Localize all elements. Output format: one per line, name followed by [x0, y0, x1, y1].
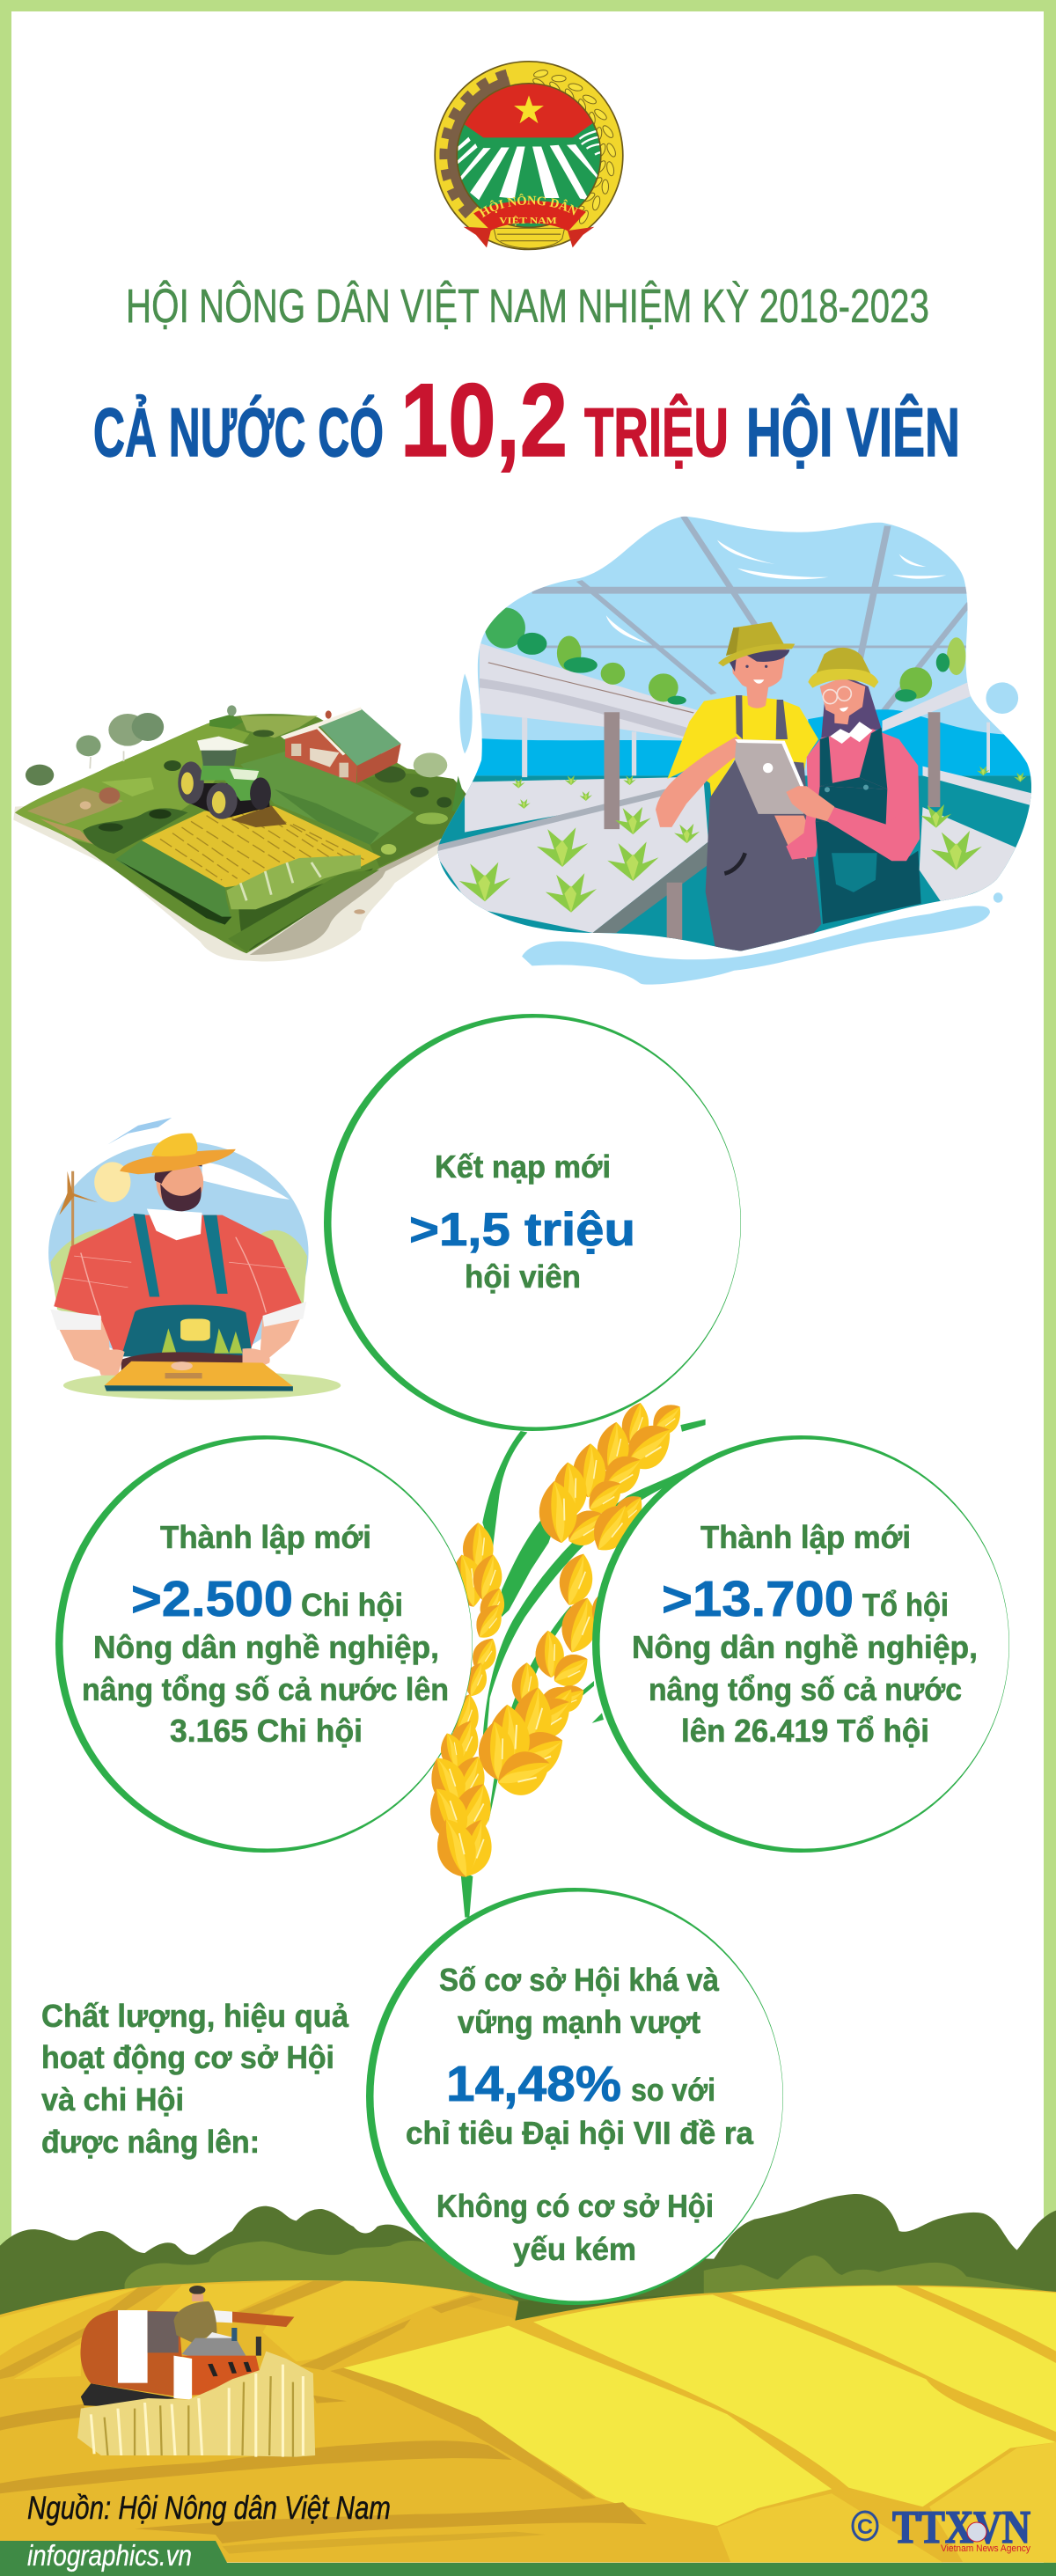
farmer face	[120, 1134, 236, 1211]
circle: quality of grassroots associations: 14,48%	[446, 2056, 621, 2112]
rice ear: behind right circle	[534, 1487, 649, 1718]
circle: left Chi hội: Nông dân nghề nghiệp,	[93, 1629, 439, 1665]
man	[656, 622, 821, 952]
circle: Kết nạp mới	[324, 1014, 741, 1431]
background	[431, 709, 1044, 775]
circle: left Chi hội: 3.165 Chi hội	[170, 1713, 363, 1749]
illustration: farm island with tractor	[13, 705, 484, 962]
circle: right Tổ hội	[592, 1435, 1009, 1853]
illustration: farmer holding tray	[48, 1118, 341, 1400]
ribbon	[463, 194, 595, 248]
woman	[786, 648, 921, 924]
circle: left Chi hội: >2.500	[131, 1571, 293, 1627]
yellow crop field	[142, 805, 381, 887]
logo: TTXVN: Vietnam News Agency	[941, 2543, 1030, 2554]
circle: right Tổ hội: nâng tổng số cả nước	[649, 1671, 962, 1707]
circle: quality of grassroots associations	[366, 1888, 783, 2305]
circle: left Chi hội	[55, 1435, 473, 1853]
circle: right Tổ hội: >13.700	[662, 1571, 854, 1627]
circle: quality of grassroots associations: yếu kém	[513, 2231, 636, 2267]
circle: quality of grassroots associations: vững mạnh vượt	[458, 2004, 700, 2040]
ribbon: VIỆT NAM	[499, 215, 557, 226]
footer band: infographics.vn	[0, 2539, 1056, 2576]
circle: Kết nạp mới: >1,5 triệu	[409, 1204, 635, 1256]
text block: quality statement: hoạt động cơ sở Hội	[41, 2039, 334, 2075]
circle: left Chi hội: Thành lập mới	[160, 1519, 371, 1555]
circle: right Tổ hội: Nông dân nghề nghiệp,	[632, 1629, 978, 1665]
circle: quality of grassroots associations: Số cơ sở Hội khá và	[439, 1962, 720, 1998]
lettuce plants	[459, 766, 1027, 913]
footer band: infographics.vn: infographics.vn	[27, 2539, 192, 2572]
circle: left Chi hội: nâng tổng số cả nước lên	[82, 1671, 449, 1707]
title: CẢ NƯỚC CÓ	[93, 393, 384, 471]
circle: right Tổ hội: Tổ hội	[862, 1587, 949, 1623]
icon: rice stalks (leaves and upper ears)	[445, 1397, 706, 1918]
trees	[26, 705, 447, 786]
circle: right Tổ hội: Thành lập mới	[700, 1519, 911, 1555]
rice ear: left, lower part	[421, 1715, 500, 1885]
circle: left Chi hội: Chi hội	[301, 1587, 403, 1623]
logo: TTXVN	[853, 2502, 1030, 2554]
greenhouse frame	[525, 517, 973, 713]
tractor	[178, 737, 271, 819]
text block: quality statement: Chất lượng, hiệu quả	[41, 1998, 349, 2034]
water splashes	[459, 673, 1018, 985]
circle: Kết nạp mới: Kết nạp mới	[435, 1149, 611, 1185]
hanging plants	[485, 607, 965, 705]
circle: quality of grassroots associations: Không có cơ sở Hội	[436, 2188, 714, 2224]
rice ear: left, upper part	[445, 1523, 510, 1744]
circle: quality of grassroots associations: so với	[631, 2072, 715, 2108]
wheat wreath	[530, 66, 618, 226]
title	[93, 363, 960, 479]
title: HỘI VIÊN	[746, 393, 960, 471]
illustration: greenhouse farmers	[431, 511, 1044, 985]
icon: Vietnam Farmers' Union emblem	[434, 61, 624, 250]
logo: TTXVN: TTXVN	[892, 2502, 1030, 2553]
harvester	[80, 2286, 294, 2406]
rice ear: upper right	[536, 1397, 687, 1554]
circle: quality of grassroots associations: chỉ tiêu Đại hội VII đề ra	[406, 2115, 754, 2151]
circle: right Tổ hội: lên 26.419 Tổ hội	[681, 1713, 929, 1749]
text block: quality statement: được nâng lên:	[41, 2124, 260, 2160]
logo: TTXVN: C	[857, 2515, 873, 2539]
source note: Nguồn: Hội Nông dân Việt Nam	[27, 2490, 391, 2526]
darker furrows	[330, 2368, 596, 2499]
stems and leaves	[460, 1420, 706, 1918]
ribbon: HỘI NÔNG DÂN	[479, 194, 579, 218]
circle: Kết nạp mới: hội viên	[465, 1259, 581, 1295]
title: TRIỆU	[584, 393, 729, 471]
fields	[0, 2280, 1056, 2563]
poles	[604, 712, 940, 945]
tablet	[735, 739, 803, 814]
rice ear: center	[477, 1662, 580, 1803]
text block: quality statement	[41, 1998, 349, 2160]
rural landscape background	[0, 2194, 1056, 2563]
text block: quality statement: và chi Hội	[41, 2081, 184, 2117]
bright field patches	[343, 2326, 832, 2526]
house	[281, 707, 401, 783]
harvested rice	[77, 2352, 315, 2457]
hydroponic shelves	[480, 643, 700, 741]
title: 10,2	[400, 363, 568, 479]
